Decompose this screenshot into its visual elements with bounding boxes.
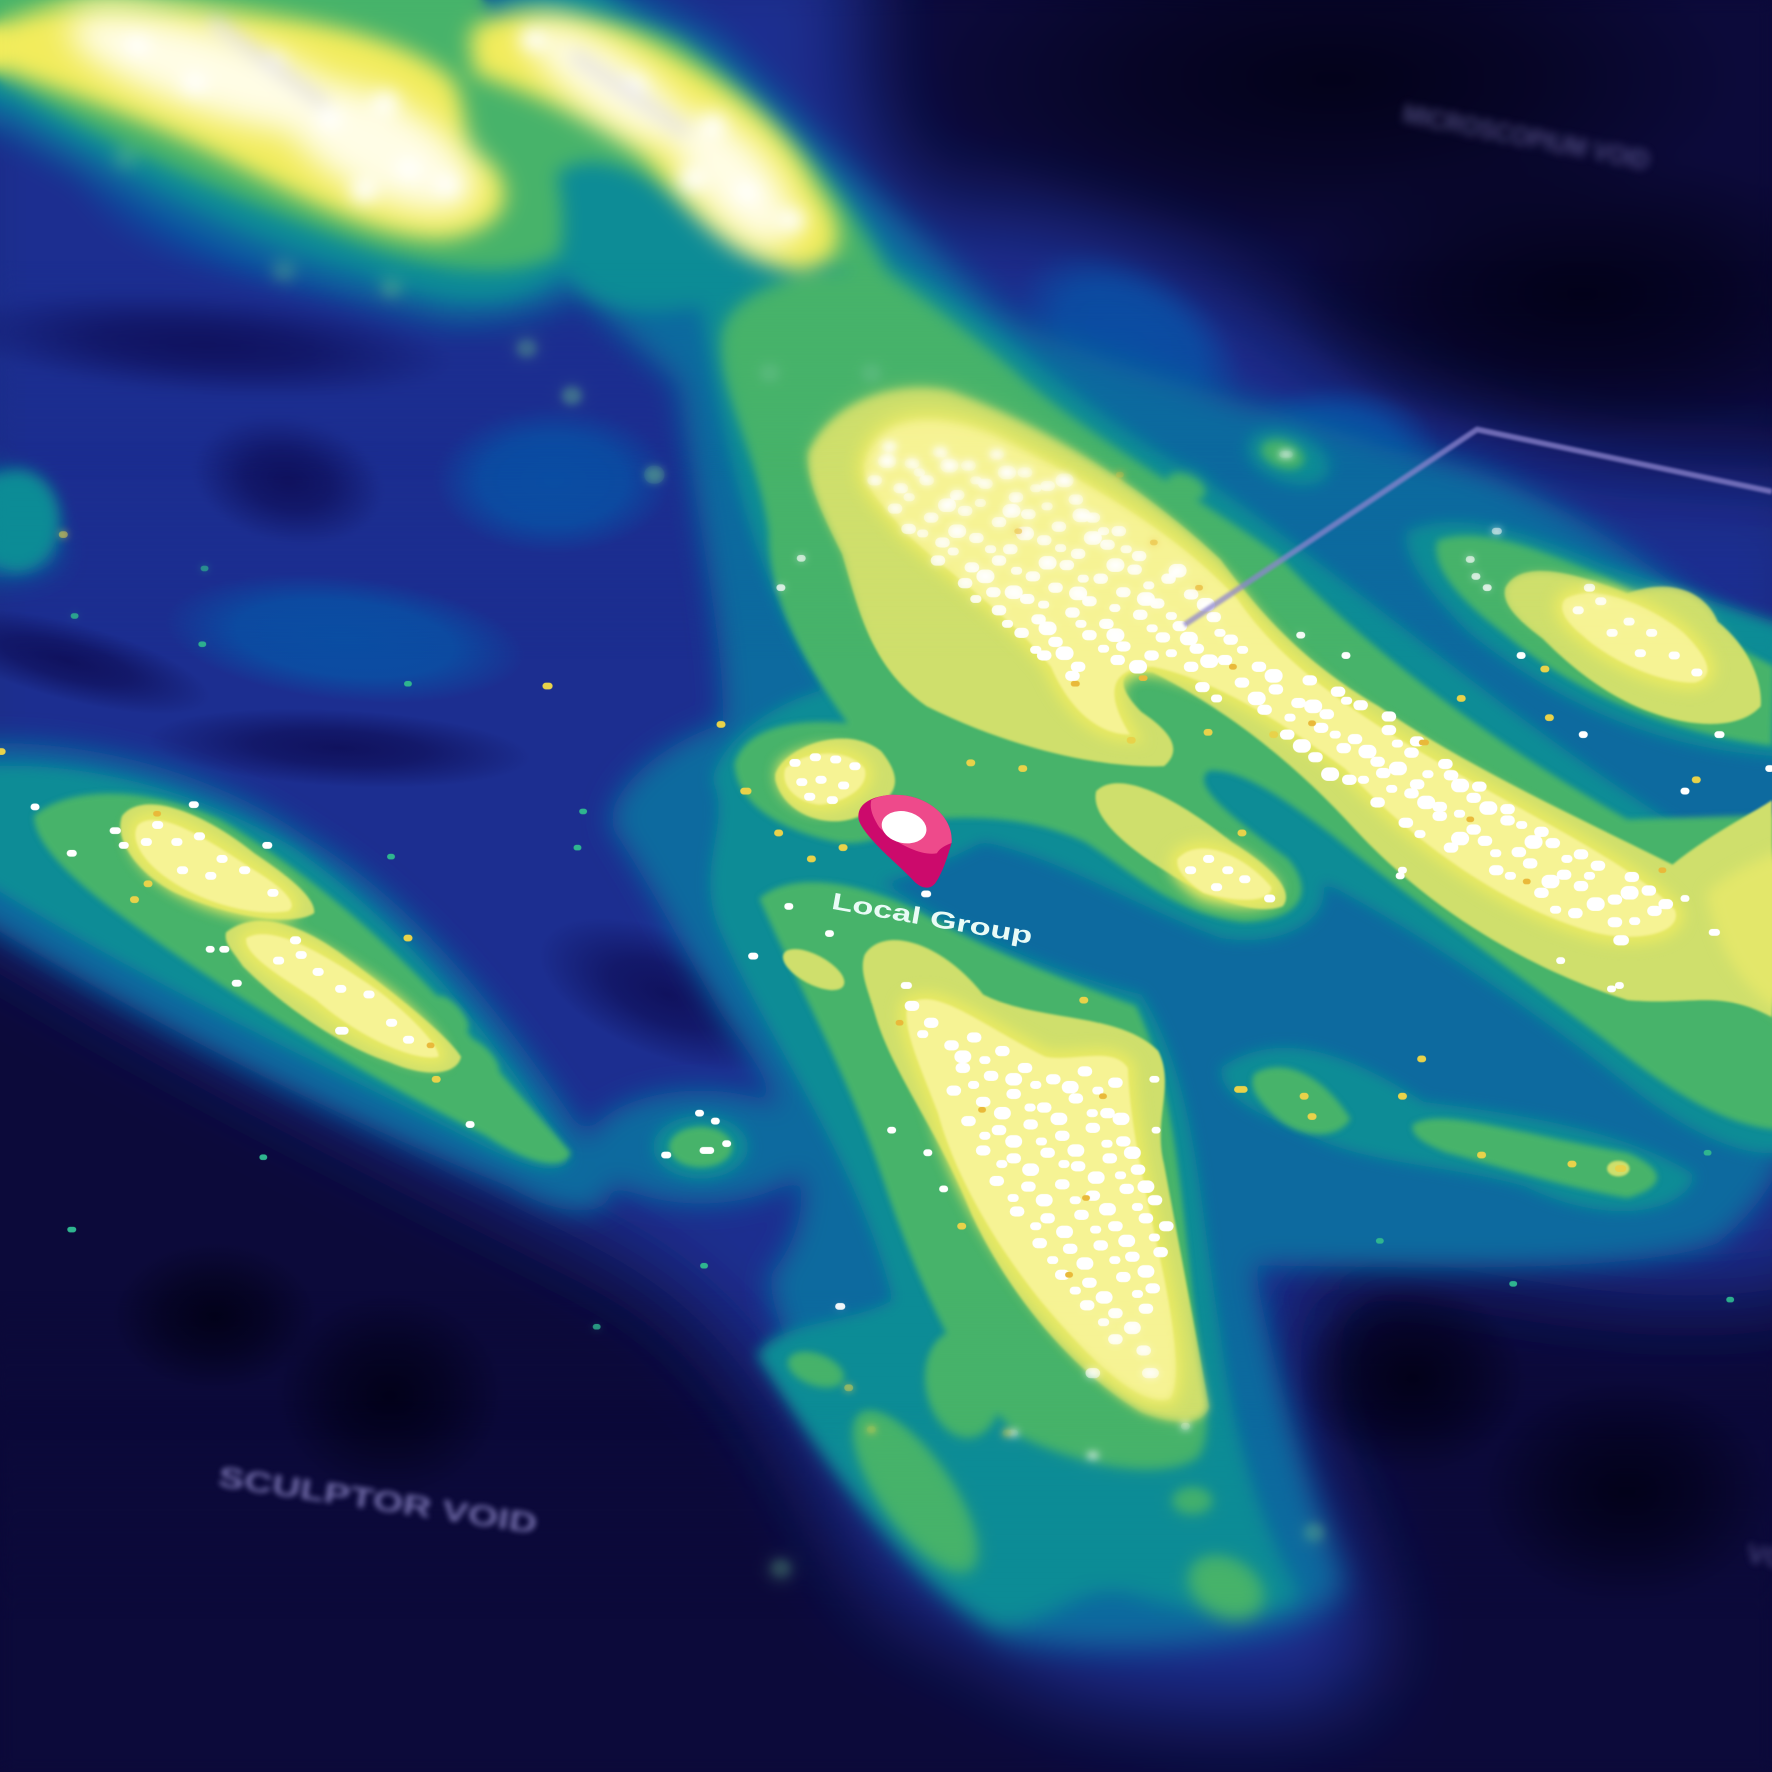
east filament yellow end	[1706, 848, 1772, 1017]
galaxy dots: white	[34, 40, 1771, 1456]
depth-of-field lens: far focus	[0, 0, 1324, 1628]
galaxy dots: teal field	[70, 158, 1731, 1569]
location pin: Local Group	[858, 795, 952, 888]
yellow glow under bright cores	[135, 420, 1707, 1400]
galaxy dots: gold and lime	[0, 475, 1697, 1433]
bright top filaments	[0, 3, 838, 271]
label: Sculptor Void (blurred): SCULPTOR VOID	[216, 1460, 539, 1540]
white-hot filament cores	[57, 0, 816, 268]
pale yellow core	[135, 420, 1707, 1400]
callout leader line	[1184, 429, 1772, 625]
label: Local Group: Local Group	[830, 889, 1034, 950]
mid-blue patches	[57, 92, 1692, 1182]
label: distant void (blurred, illegible in the reference): MICROSCOPIUM VOID	[1400, 98, 1652, 176]
yellow-green contour	[120, 387, 1772, 1422]
dark void patches	[0, 278, 816, 1103]
grey streaks: blurred lines over top filaments	[215, 23, 684, 130]
